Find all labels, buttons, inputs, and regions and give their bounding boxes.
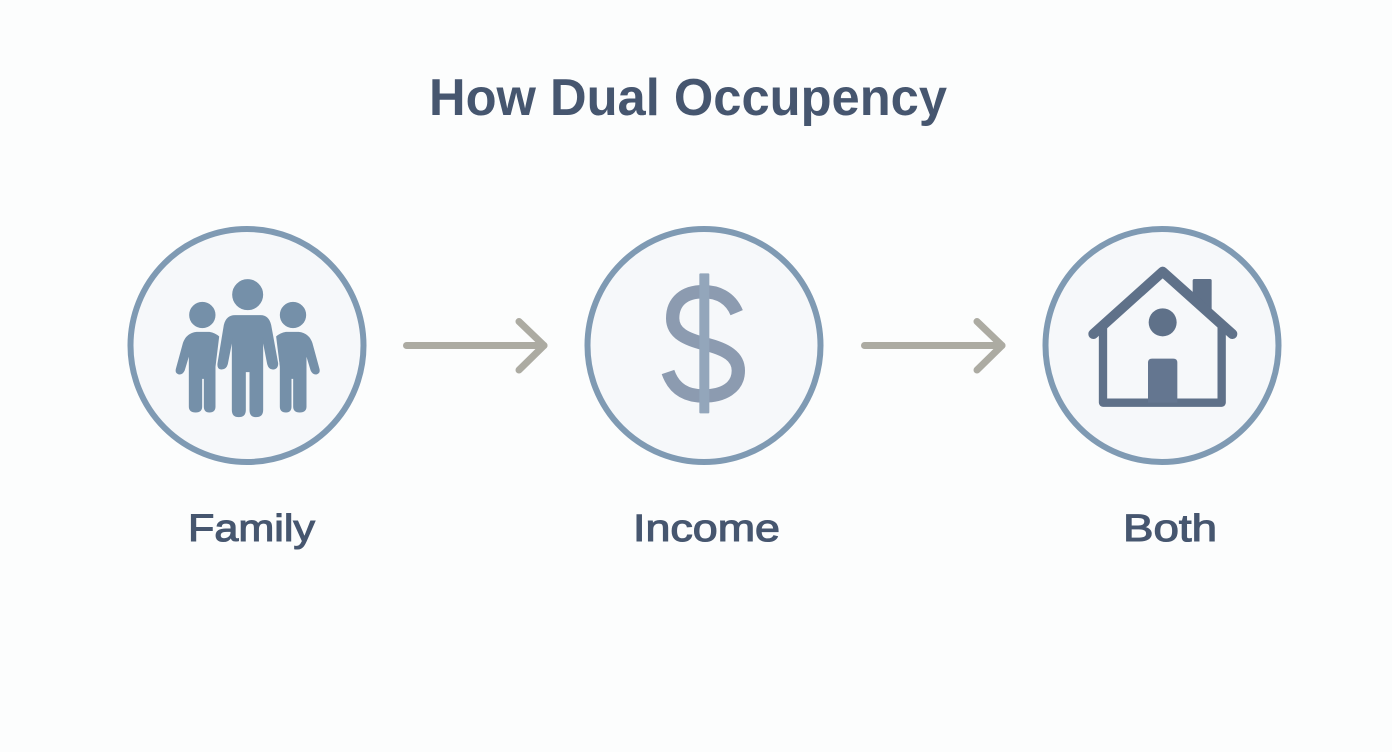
step: both [1046,229,1278,550]
circle: income [588,229,820,462]
title: How Dual Occupency [429,69,947,127]
icon: dollar sign [668,273,738,413]
step: family [130,229,364,550]
label: income: Income [633,508,780,550]
circle: family [130,229,364,462]
icon: house [1093,272,1232,403]
arrow: income to both [864,322,1002,370]
step: income [588,229,820,550]
icon: family of three people [176,280,319,417]
label: both: Both [1123,508,1217,550]
label: family: Family [188,508,315,550]
arrow: family to income [406,322,544,370]
circle: both [1046,229,1278,462]
